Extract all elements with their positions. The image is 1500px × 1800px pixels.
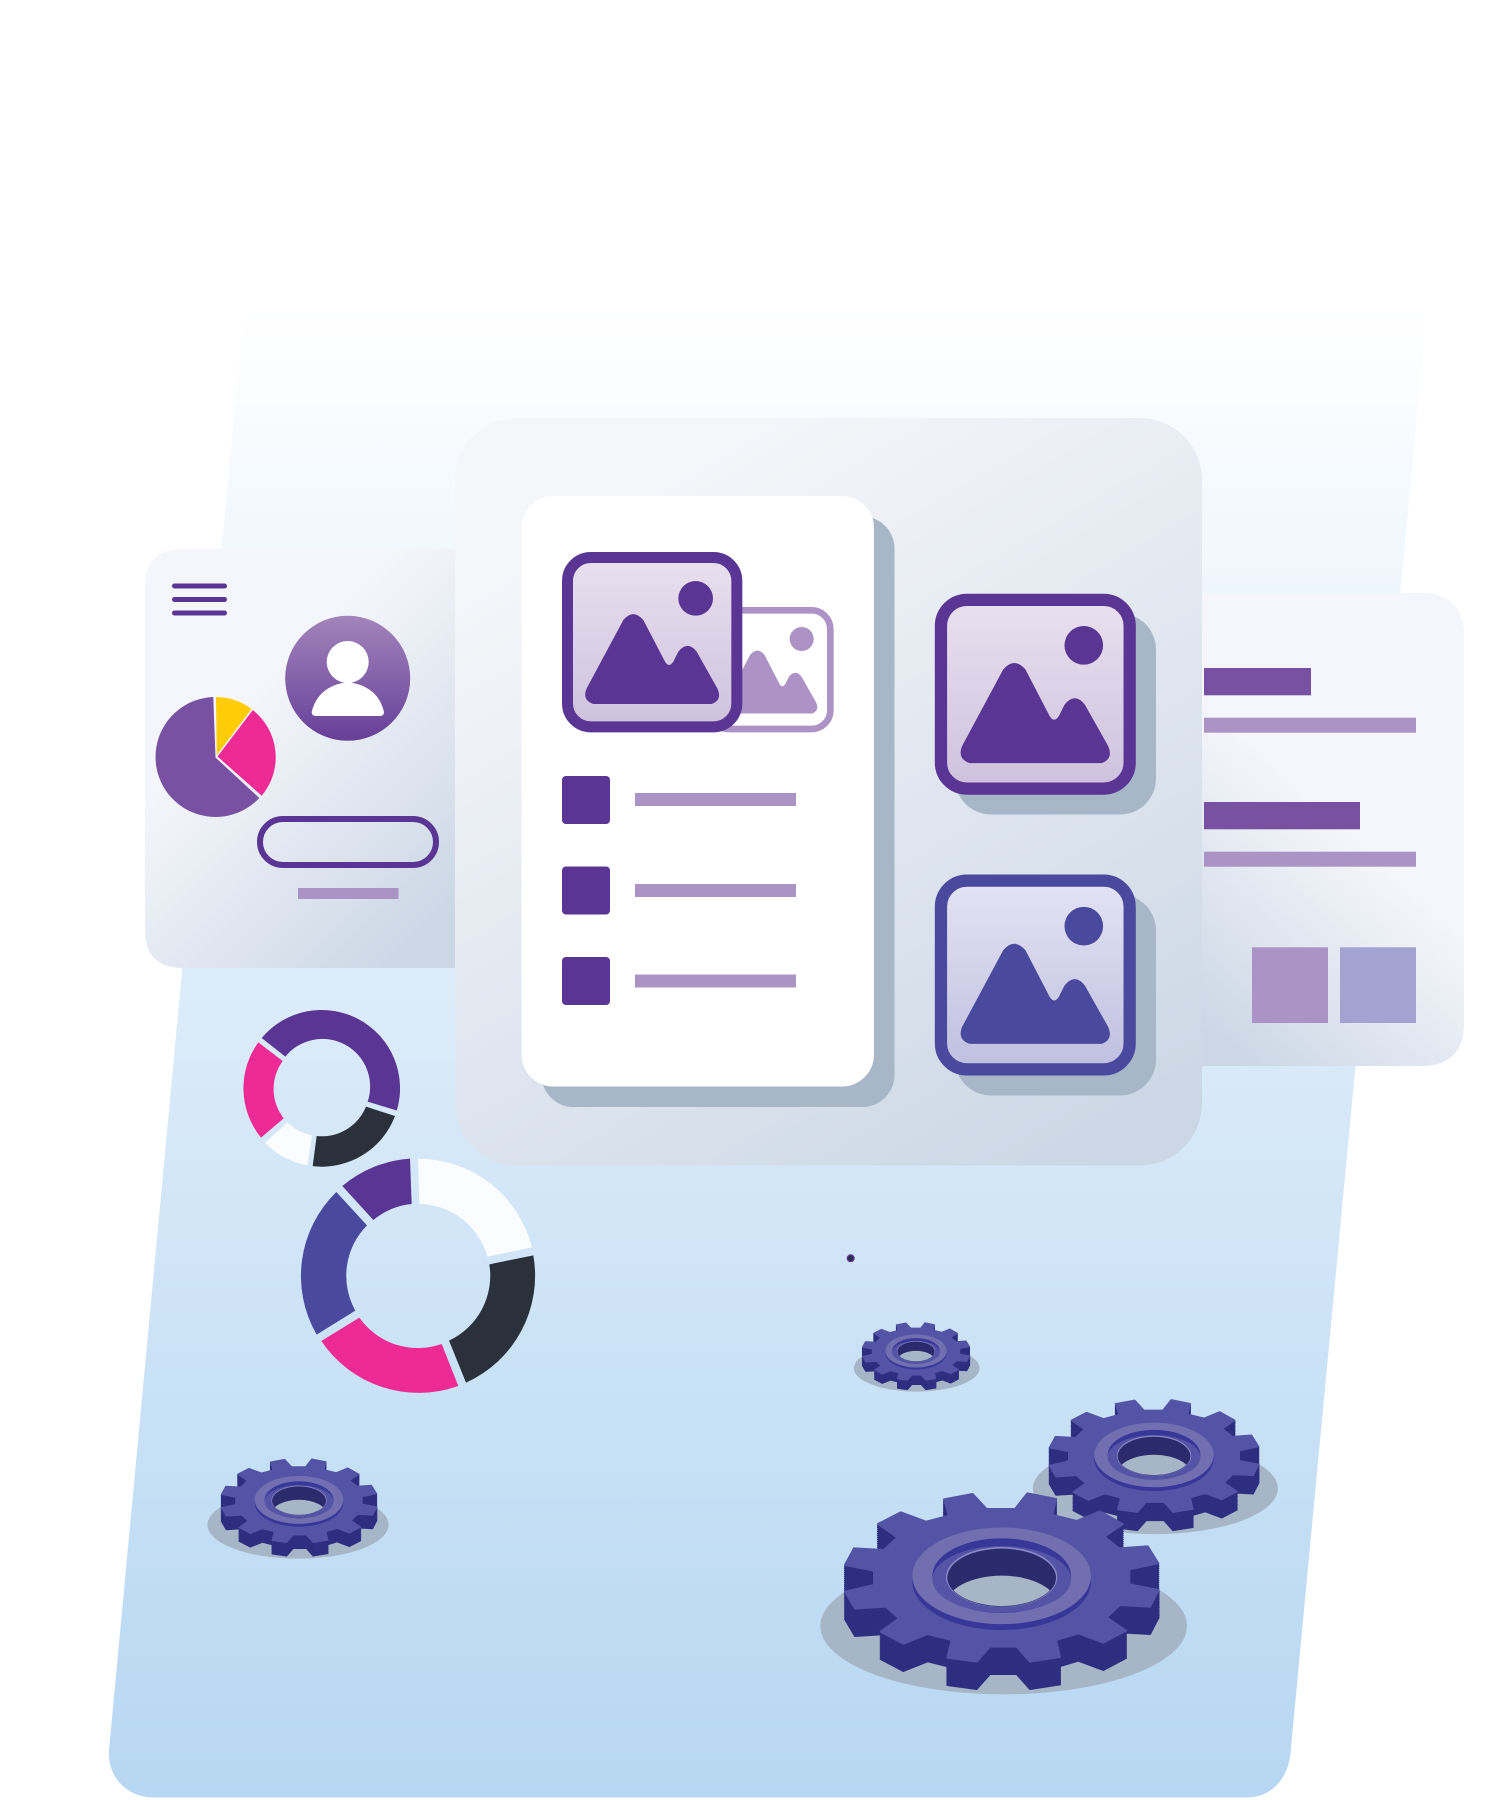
icon: large image, purple (567, 557, 737, 727)
icon: small image behind (710, 610, 830, 729)
icon: user avatar (285, 616, 410, 741)
icon: image bottom right, indigo (941, 881, 1130, 1069)
white content card (522, 496, 874, 1086)
panel: left profile card (145, 549, 455, 968)
gear large (820, 1493, 1187, 1694)
tiny dot gear (847, 1255, 854, 1262)
background: blue gradient slanted panel (109, 310, 1427, 1798)
gear medium (1033, 1400, 1278, 1534)
donut chart large (301, 1159, 535, 1393)
panel: main central card (455, 418, 1202, 1166)
colour swatch purple (1252, 947, 1328, 1023)
icon shadow bottom right (955, 894, 1156, 1096)
input field pill (260, 819, 436, 865)
icon shadow top right (955, 614, 1156, 814)
heading bar 2 (1204, 802, 1360, 829)
gear left (207, 1459, 389, 1559)
gear small top (854, 1323, 980, 1392)
colour swatch indigo (1340, 947, 1416, 1023)
text line 2 (1204, 852, 1416, 867)
icon: hamburger menu (172, 584, 227, 616)
donut chart small (243, 1010, 400, 1167)
panel: right text card (1202, 593, 1464, 1066)
icon: image top right, purple (941, 600, 1130, 789)
heading bar 1 (1204, 668, 1311, 695)
pie chart (156, 697, 276, 817)
white card shadow (542, 516, 894, 1107)
list rows (562, 776, 796, 1005)
text line 1 (1204, 718, 1416, 733)
caption line (298, 888, 398, 899)
